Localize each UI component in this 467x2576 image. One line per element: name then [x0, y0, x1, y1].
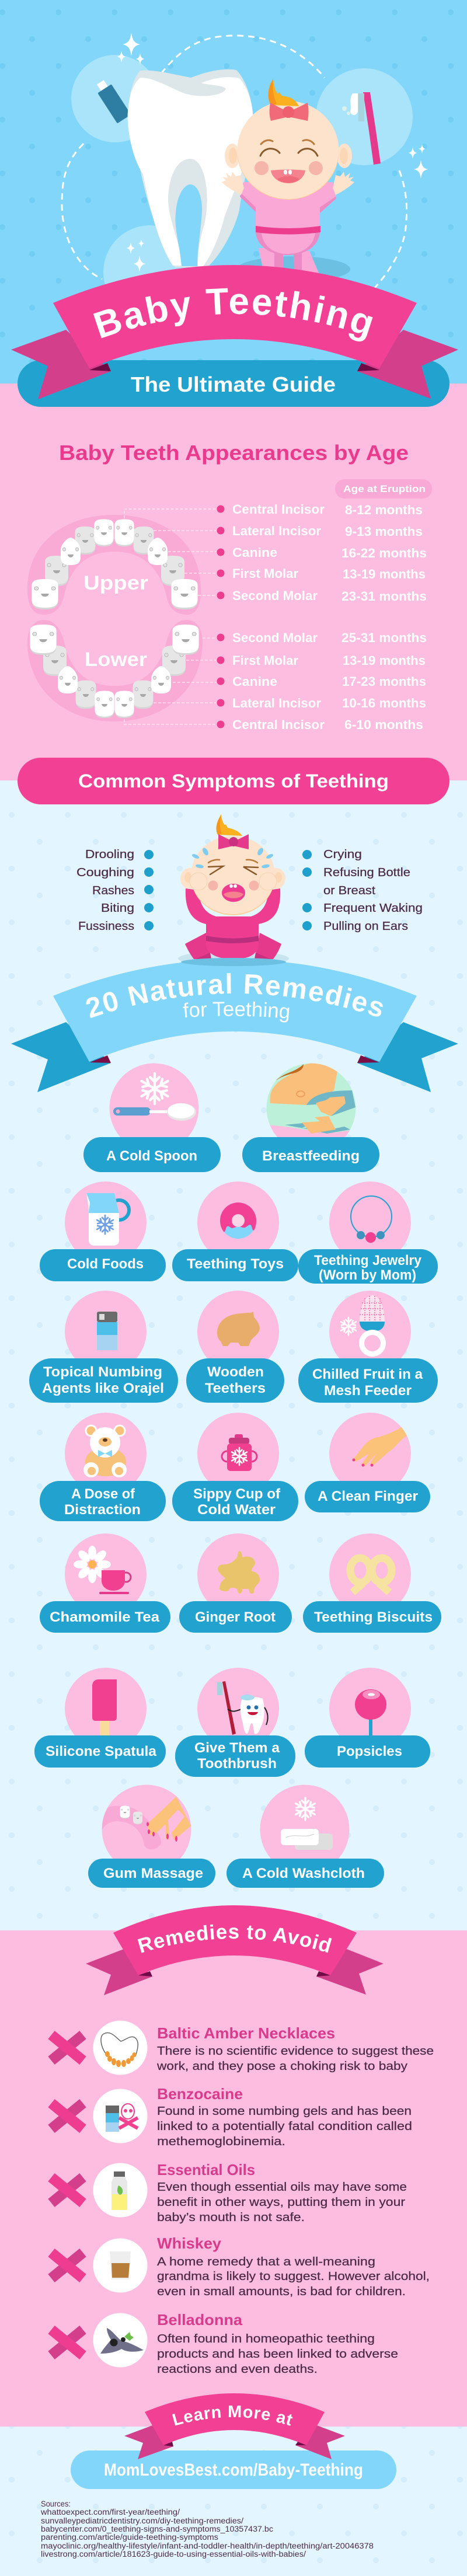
hero illustration [62, 33, 428, 319]
table: upper teeth: Central Incisor [232, 502, 325, 517]
remedy: sippy cup of cold water [172, 1413, 298, 1521]
sources [40, 2500, 374, 2558]
symptoms list: left: Drooling [85, 848, 134, 861]
label: Wooden [207, 1364, 264, 1380]
pill [40, 1481, 166, 1521]
table: lower teeth: 13-19 months [343, 653, 426, 668]
label: Topical Numbing [43, 1364, 162, 1380]
label: Teething Biscuits [314, 1609, 433, 1625]
table: upper teeth: 16-22 months [341, 546, 427, 560]
label: Chilled Fruit in a [312, 1367, 423, 1382]
table: lower teeth: First Molar [232, 653, 298, 668]
icon: belladonna plant [93, 2313, 147, 2368]
dashed circle around tooth [62, 36, 407, 309]
label: A Cold Washcloth [242, 1866, 365, 1881]
subtitle: The Ultimate Guide [131, 372, 336, 396]
symptoms list: left: Coughing [76, 866, 134, 879]
label: A Dose of [71, 1486, 135, 1502]
pill: common symptoms [18, 758, 449, 804]
pill: age at eruption [335, 479, 432, 499]
pill [303, 1601, 441, 1633]
remedy: wooden teethers [186, 1291, 284, 1403]
heading: baby teeth appearances by age: Baby Teeth Appearances by Age [59, 441, 409, 465]
icon: whiskey glass [93, 2238, 147, 2293]
pill [40, 1249, 166, 1281]
pill [88, 1859, 215, 1888]
body text: Often found in homeopathic teething [157, 2333, 375, 2345]
body text: linked to a potentially fatal condition called [157, 2120, 412, 2133]
symptoms list: right: Refusing Bottle [323, 866, 410, 879]
symptoms list: right: or Breast [323, 884, 375, 897]
symptoms list: left: Fussiness [78, 920, 134, 933]
table: upper teeth: 23-31 months [341, 589, 427, 604]
table: upper teeth: 13-19 months [343, 567, 426, 581]
label: Silicone Spatula [46, 1744, 157, 1759]
body text: A home remedy that a well-meaning [157, 2256, 375, 2268]
leader lines and bullets [124, 506, 224, 728]
label: Give Them a [194, 1740, 280, 1756]
ribbon: learn more at [124, 2393, 345, 2459]
pill [172, 1249, 298, 1281]
table: upper teeth [232, 502, 427, 604]
remedy: give them a toothbrush [175, 1668, 295, 1777]
remedy: cold foods [40, 1181, 166, 1281]
symptoms list: right: Frequent Waking [323, 902, 423, 915]
label: lower: Lower [85, 649, 147, 671]
table: upper teeth: First Molar [232, 566, 298, 581]
symptoms list: right: Crying [323, 848, 362, 861]
table: upper teeth: Canine [232, 545, 277, 560]
icon: wooden pig [217, 1312, 260, 1346]
label: Ginger Root [195, 1609, 276, 1625]
sources: babycenter.com/0_teething-signs-and-symptoms_10357437.bc [41, 2525, 273, 2533]
url text: MomLovesBest.com/Baby-Teething [104, 2460, 363, 2480]
remedy: chamomile tea [40, 1533, 170, 1633]
body text: even in small amounts, is bad for children. [157, 2285, 406, 2298]
pill [242, 1137, 379, 1172]
avoid: essential oils [51, 2161, 407, 2224]
pill [83, 1137, 221, 1172]
body text: reactions and even deaths. [157, 2363, 318, 2376]
icon: hand with finger [353, 1426, 409, 1466]
background: pink remedies to avoid section [0, 1930, 467, 2427]
label: Teething Jewelry [314, 1253, 422, 1268]
pill [40, 1601, 170, 1633]
avoid: benzocaine [51, 2085, 412, 2148]
label: A Clean Finger [318, 1489, 418, 1504]
remedy: ginger root [179, 1533, 292, 1633]
label: (Worn by Mom) [319, 1267, 416, 1283]
url pill [71, 2450, 396, 2489]
pill [179, 1601, 292, 1633]
body text: Found in some numbing gels and has been [157, 2105, 412, 2118]
label: Toothbrush [197, 1756, 277, 1772]
icon: ginger root [218, 1551, 260, 1594]
remedy: popsicles [305, 1668, 430, 1768]
icon: tooth with toothbrush [217, 1681, 268, 1735]
icon: gum with fingers [102, 1797, 191, 1849]
title ribbon [11, 265, 458, 399]
label: Teething Toys [187, 1256, 284, 1272]
icon: cross [51, 2253, 83, 2278]
sources: sunvalleypediatricdentistry.com/diy-teething-remedies/ [41, 2516, 243, 2525]
table: upper teeth: 9-13 months [345, 524, 423, 539]
icon: sparkles [117, 33, 428, 272]
title: Baby Teething [93, 288, 373, 341]
pill [34, 1735, 166, 1768]
icon: toothpaste [93, 78, 131, 123]
icon: breastfeeding mother and baby [270, 1064, 356, 1137]
table: upper teeth: Second Molar [232, 588, 318, 603]
icon: decorative bubbles [71, 55, 413, 319]
icon: teddy bear [83, 1425, 127, 1477]
title: 20 natural remedies: 20 Natural Remedies [86, 973, 383, 1018]
heading: Baltic Amber Necklaces [157, 2024, 335, 2042]
label: Distraction [64, 1502, 141, 1518]
table: lower teeth: 17-23 months [342, 674, 426, 689]
sources: mayoclinic.org/healthy-lifestyle/infant-and-toddler-health/in-depth/teething/art-20046378 [41, 2542, 374, 2550]
title: remedies to avoid: Remedies to Avoid [138, 1924, 332, 1953]
remedy: a cold washcloth [226, 1785, 384, 1888]
body text: Even though essential oils may have some [157, 2181, 407, 2194]
icon: spatula [92, 1679, 117, 1737]
illustration: big tooth [128, 69, 253, 267]
pill [305, 1481, 430, 1512]
table: lower teeth: 6-10 months [344, 717, 423, 732]
remedy: a clean finger [305, 1413, 430, 1512]
body text: There is no scientific evidence to suggest these [157, 2045, 434, 2058]
background: hero sky [0, 0, 467, 384]
icon: cold spoon [113, 1073, 196, 1121]
pill [226, 1859, 384, 1888]
remedy: teething jewelry [298, 1181, 438, 1284]
symptoms list: right [302, 848, 423, 933]
icon: cross [51, 2177, 83, 2203]
heading: Essential Oils [157, 2161, 255, 2178]
remedy: chilled fruit in a mesh feeder [298, 1291, 438, 1403]
pill [172, 1481, 298, 1521]
icon: necklace [351, 1196, 392, 1243]
sources: parenting.com/article/guide-teething-symptoms [41, 2533, 218, 2542]
body text: benefit in other ways, putting them in your [157, 2196, 405, 2209]
symptoms list: left: Rashes [92, 884, 134, 897]
icon: toothbrush [342, 92, 381, 165]
label: Cold Water [197, 1502, 276, 1518]
pill [305, 1735, 430, 1768]
label: Chamomile Tea [50, 1609, 160, 1625]
body text: work, and they pose a choking risk to baby [156, 2060, 407, 2073]
label: upper: Upper [83, 572, 148, 594]
label: A Cold Spoon [106, 1148, 197, 1164]
background: pink teeth section [0, 384, 467, 780]
remedy: teething toys [172, 1181, 298, 1281]
label: Agents like Orajel [42, 1381, 164, 1396]
illustration: happy baby [222, 79, 354, 282]
table: lower teeth: Central Incisor [232, 717, 325, 732]
heading: Whiskey [157, 2235, 222, 2252]
ribbon: 20 natural remedies [11, 958, 458, 1092]
pill [29, 1358, 178, 1403]
remedy: topical numbing agents [29, 1291, 178, 1403]
icon: mesh feeder [340, 1295, 385, 1354]
heading: Benzocaine [157, 2085, 243, 2103]
icon: cross [51, 2035, 83, 2061]
sources: whattoexpect.com/first-year/teething/ [40, 2508, 180, 2516]
guide pill [18, 360, 449, 407]
icon: donut teether [220, 1202, 256, 1239]
body text: grandma is likely to suggest. However alcohol, [157, 2270, 430, 2283]
remedy: silicone spatula [34, 1668, 166, 1768]
label: Cold Foods [67, 1256, 144, 1272]
heading: Belladonna [157, 2311, 243, 2328]
icon: essential oil bottle [93, 2163, 147, 2217]
sources: livestrong.com/article/181623-guide-to-using-essential-oils-with-babies/ [41, 2550, 306, 2558]
pill [175, 1735, 295, 1777]
label: age at eruption: Age at Eruption [343, 483, 426, 494]
ribbon: remedies to avoid [86, 1905, 384, 1995]
table: upper teeth: Lateral Incisor [232, 524, 321, 538]
body text: products and has been linked to adverse [157, 2348, 398, 2361]
pill [298, 1249, 438, 1284]
icon: numbing gel bottle [97, 1312, 117, 1350]
table: upper teeth: 8-12 months [345, 503, 423, 517]
table: lower teeth: 25-31 months [341, 630, 427, 645]
label: Popsicles [337, 1744, 402, 1759]
label: Breastfeeding [262, 1148, 360, 1164]
body text: methemoglobinemia. [157, 2135, 285, 2148]
table: lower teeth [232, 630, 427, 732]
upper teeth diagram [27, 515, 201, 615]
avoid: belladonna [51, 2311, 398, 2376]
icon: lollipop popsicle [355, 1689, 386, 1737]
table: lower teeth: 10-16 months [342, 696, 426, 710]
remedy: a dose of distraction [40, 1413, 166, 1521]
remedy: breastfeeding [242, 1062, 379, 1172]
label: Gum Massage [103, 1866, 203, 1881]
symptoms list: right: Pulling on Ears [323, 920, 408, 933]
sources: Sources: [41, 2500, 71, 2508]
body text: baby’s mouth is not safe. [157, 2211, 305, 2224]
pill [186, 1358, 284, 1403]
subtitle: for teething: for Teething [183, 1002, 290, 1023]
label: Teethers [205, 1381, 266, 1396]
icon: sippy cup [222, 1434, 257, 1471]
icon: cross [51, 2103, 83, 2129]
title: learn more at: Learn More at [172, 2406, 293, 2426]
avoid: whiskey [51, 2235, 430, 2298]
remedy: gum massage [88, 1785, 215, 1888]
pill [298, 1358, 438, 1403]
icon: chamomile and tea cup [74, 1546, 131, 1594]
table: lower teeth: Second Molar [232, 630, 318, 645]
illustration: crying baby [178, 814, 289, 966]
icon: bottle and skull [93, 2089, 147, 2143]
icon: pretzel biscuit [350, 1558, 392, 1592]
symptoms list: left [76, 848, 154, 933]
table: lower teeth: Lateral Incisor [232, 696, 321, 710]
label: Sippy Cup of [193, 1486, 281, 1502]
icon: washcloth [281, 1798, 333, 1850]
symptoms list: left: Biting [101, 902, 134, 915]
remedy: teething biscuits [303, 1533, 441, 1633]
icon: jug [86, 1193, 129, 1246]
avoid: baltic amber necklaces [51, 2021, 434, 2075]
heading: common symptoms of teething: Common Symptoms of Teething [78, 771, 389, 792]
icon: amber necklace [93, 2021, 147, 2075]
lower teeth diagram [27, 620, 203, 721]
icon: cross [51, 2330, 83, 2355]
label: Mesh Feeder [324, 1383, 412, 1399]
table: lower teeth: Canine [232, 674, 277, 689]
remedy: a cold spoon [83, 1064, 221, 1172]
